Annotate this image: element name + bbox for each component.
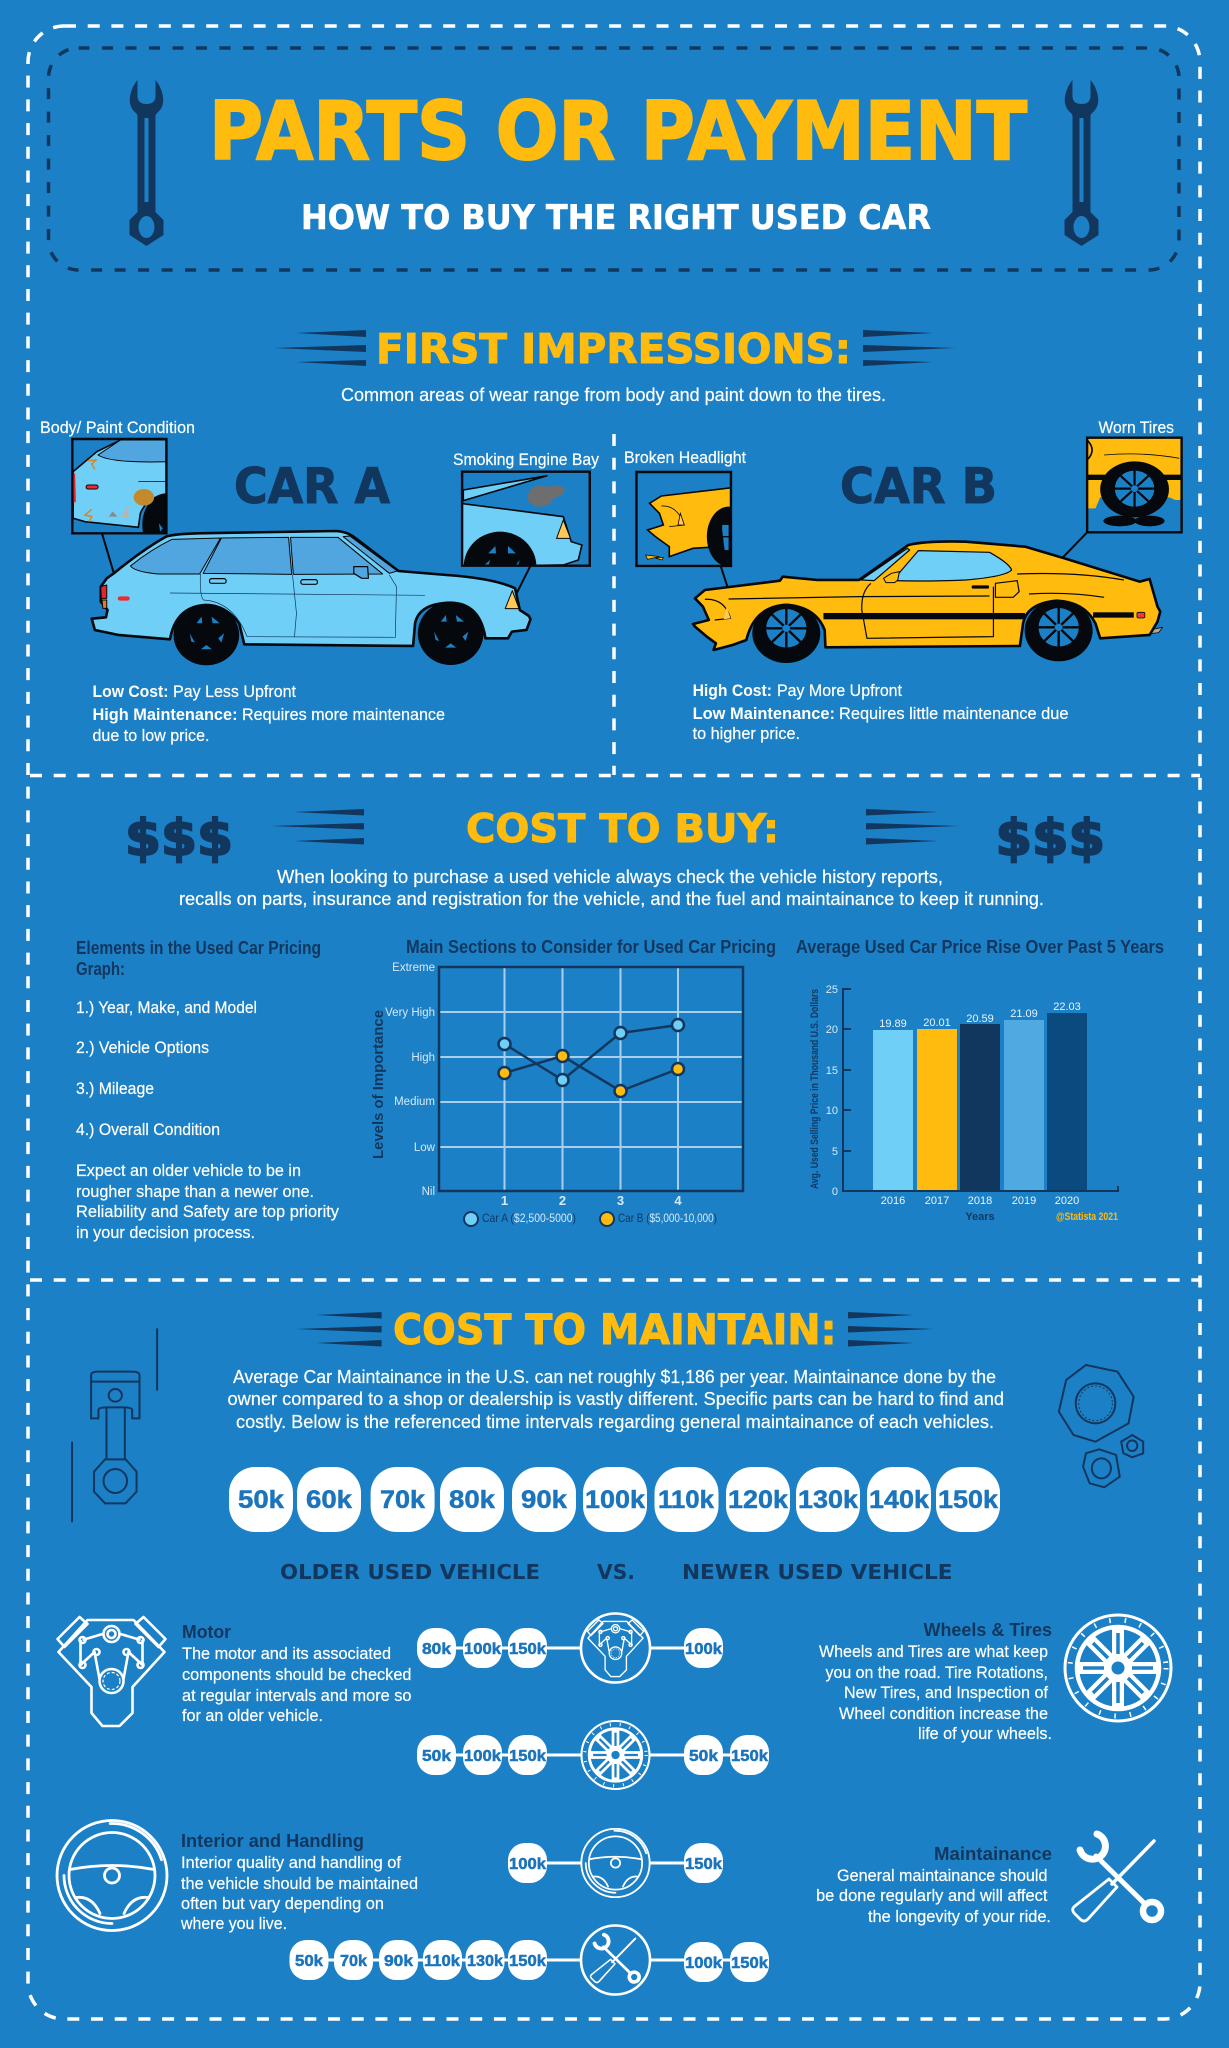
- chart: used car price bars: 15: [826, 1065, 838, 1077]
- chart: used car price bars: 2020: [1055, 1195, 1079, 1207]
- timeline: wheels: [417, 1720, 769, 1790]
- text block: pricing elements: rougher shape than a newer one.: [76, 1182, 314, 1201]
- label: smoking engine bay: Smoking Engine Bay: [453, 450, 599, 469]
- timeline: maintainance: 130k: [467, 1953, 503, 1970]
- panel: car A: [40, 418, 599, 745]
- heading: car A: CAR A: [234, 458, 390, 515]
- timeline: maintainance: 50k: [295, 1953, 323, 1970]
- chart: importance line chart: 4: [674, 1193, 682, 1208]
- text block: pricing elements: Expect an older vehicle to be in: [76, 1161, 301, 1180]
- timeline: interior: 100k: [509, 1856, 546, 1873]
- comparison headings: OLDER USED VEHICLE: [280, 1560, 540, 1584]
- heading: cost to buy: $$$: [125, 809, 233, 867]
- icon: right wrench: [1064, 80, 1098, 246]
- text block: wheels and tires: Wheel condition increase the: [839, 1704, 1048, 1723]
- chart: used car price bars: [796, 937, 1164, 1223]
- text block: maintainance: General maintainance should: [837, 1866, 1048, 1885]
- text: high cost: Low Maintenance:: [693, 704, 835, 723]
- text: low cost: Pay Less Upfront: [173, 682, 296, 701]
- timeline: motor: 100k: [464, 1641, 501, 1658]
- text: high cost: [693, 681, 1068, 743]
- mileage pill scale: 130k: [798, 1486, 858, 1514]
- intro text: cost to maintain: owner compared to a shop or dealership is vastly different. Specific parts can be hard to find and: [228, 1389, 1004, 1409]
- comparison headings: [280, 1560, 952, 1584]
- icon: engine: [58, 1617, 166, 1726]
- chart: importance line chart: Medium: [394, 1096, 435, 1108]
- timeline: maintainance: 110k: [424, 1953, 460, 1970]
- icon: nuts: [1059, 1365, 1143, 1487]
- chart: used car price bars: @Statista 2021: [1056, 1211, 1118, 1223]
- text block: motor: The motor and its associated: [182, 1644, 391, 1663]
- timeline: wheels: 50k: [422, 1748, 451, 1765]
- chart: importance line chart: Low: [414, 1142, 436, 1154]
- text: high cost: to higher price.: [693, 724, 800, 743]
- chart: used car price bars: 2018: [968, 1195, 992, 1207]
- text block: wheels and tires: Wheels & Tires: [924, 1620, 1052, 1640]
- chart title: Main Sections to Consider for Used Car Pricing: [406, 937, 776, 957]
- mileage pill scale: 70k: [380, 1486, 425, 1514]
- timeline: motor: 100k: [685, 1641, 722, 1658]
- heading: car B: CAR B: [840, 458, 997, 515]
- mileage pill scale: 110k: [658, 1486, 714, 1514]
- mileage pill scale: 140k: [869, 1486, 929, 1514]
- label: worn tires: Worn Tires: [1098, 418, 1174, 437]
- chart: importance line chart: 2: [559, 1193, 566, 1208]
- text: low cost: Low Cost:: [92, 682, 168, 701]
- chart: importance line chart: Extreme: [392, 962, 435, 974]
- illustration: light blue wagon: [92, 531, 530, 665]
- chart: used car price bars: 21.09: [1010, 1008, 1038, 1020]
- text block: interior and handling: where you live.: [180, 1914, 287, 1933]
- label: body paint condition: Body/ Paint Condition: [40, 418, 195, 437]
- chart: importance line chart: [370, 937, 776, 1226]
- text block: maintainance: be done regularly and will affect: [816, 1886, 1048, 1905]
- chart: used car price bars: 25: [826, 984, 838, 996]
- text block: pricing elements: [76, 938, 339, 1242]
- text block: motor: [182, 1622, 412, 1725]
- timeline: maintainance: 150k: [731, 1955, 768, 1972]
- chart title: Average Used Car Price Rise Over Past 5 Years: [796, 937, 1164, 957]
- text block: interior and handling: often but vary depending on: [181, 1894, 384, 1913]
- text block: pricing elements: Elements in the Used Car Pricing: [76, 938, 321, 958]
- text block: pricing elements: in your decision process.: [76, 1223, 255, 1242]
- callout: broken headlight: [635, 470, 732, 568]
- text: low cost: Requires more maintenance: [242, 705, 445, 724]
- text block: motor: at regular intervals and more so: [182, 1686, 412, 1705]
- timeline: maintainance: 100k: [685, 1955, 722, 1972]
- heading: cost to buy: $$$: [996, 809, 1105, 867]
- chart: used car price bars: 22.03: [1053, 1001, 1081, 1013]
- mileage pill scale: 90k: [521, 1486, 567, 1514]
- icon: steering wheel: [57, 1820, 167, 1930]
- chart: used car price bars: 20: [826, 1024, 838, 1036]
- timeline: wheels: 50k: [689, 1748, 718, 1765]
- text block: pricing elements: 4.) Overall Condition: [76, 1120, 220, 1139]
- timeline: motor: [417, 1614, 723, 1682]
- mileage pill scale: [229, 1467, 1000, 1532]
- text block: interior and handling: Interior and Handling: [181, 1831, 364, 1851]
- icon: left wrench: [130, 80, 164, 246]
- chart: used car price bars: 2019: [1012, 1195, 1036, 1207]
- intro text: cost to buy: [179, 867, 1044, 909]
- text block: motor: for an older vehicle.: [182, 1706, 323, 1725]
- comparison headings: VS.: [597, 1560, 635, 1584]
- text block: wheels and tires: Wheels and Tires are what keep: [819, 1642, 1048, 1661]
- panel: car B: [624, 418, 1182, 743]
- heading: cost to buy: [125, 807, 1105, 867]
- text block: maintainance: the longevity of your ride.: [868, 1907, 1051, 1926]
- text block: interior and handling: Interior quality and handling of: [181, 1853, 401, 1872]
- comparison headings: NEWER USED VEHICLE: [682, 1560, 952, 1584]
- intro text: cost to maintain: Average Car Maintainance in the U.S. can net roughly $1,186 per year. Maintainance done by the: [233, 1367, 996, 1387]
- text: high cost: Pay More Upfront: [777, 681, 902, 700]
- timeline: wheels: 100k: [464, 1748, 501, 1765]
- intro text: cost to maintain: costly. Below is the referenced time intervals regarding general maintainance of each vehicles.: [236, 1412, 994, 1432]
- callout: worn tires: [1087, 438, 1182, 532]
- mileage pill scale: 120k: [728, 1486, 788, 1514]
- timeline: motor: 80k: [422, 1641, 451, 1658]
- chart: importance line chart: Car B ($5,000-10,000): [618, 1211, 717, 1225]
- intro text: cost to buy: recalls on parts, insurance and registration for the vehicle, and the fuel and maintainance to keep it running.: [179, 889, 1044, 909]
- header: [130, 80, 1098, 246]
- text: low cost: due to low price.: [92, 726, 210, 745]
- intro text: cost to buy: When looking to purchase a used vehicle always check the vehicle history reports,: [277, 867, 943, 887]
- chart: used car price bars: 2017: [925, 1195, 949, 1207]
- timeline: wheels: 150k: [509, 1748, 546, 1765]
- mileage pill scale: 50k: [238, 1486, 284, 1514]
- icon: tools: [1073, 1834, 1161, 1921]
- icon: wheel: [1065, 1615, 1171, 1721]
- text block: pricing elements: 3.) Mileage: [76, 1079, 154, 1098]
- chart: used car price bars: 2016: [881, 1195, 905, 1207]
- mileage pill scale: 150k: [938, 1486, 998, 1514]
- text block: wheels and tires: New Tires, and Inspection of: [844, 1683, 1048, 1702]
- text block: wheels and tires: [819, 1620, 1052, 1743]
- text block: wheels and tires: you on the road. Tire Rotations,: [826, 1663, 1048, 1682]
- timeline: maintainance: 70k: [340, 1953, 367, 1970]
- timeline connectors: [310, 1648, 750, 1960]
- text: high cost: High Cost:: [693, 681, 772, 700]
- text: low cost: [92, 682, 445, 745]
- text block: interior and handling: the vehicle should be maintained: [181, 1874, 418, 1893]
- chart: importance line chart: Very High: [385, 1007, 435, 1019]
- heading: first impressions: FIRST IMPRESSIONS:: [376, 325, 851, 373]
- callout: body damage: [71, 438, 168, 534]
- timeline: maintainance: 150k: [509, 1953, 546, 1970]
- chart: importance line chart: Levels of Importance: [370, 1010, 387, 1159]
- text: low cost: High Maintenance:: [92, 705, 238, 724]
- title: PARTS OR PAYMENT: [209, 85, 1027, 178]
- heading: cost to buy: COST TO BUY:: [466, 807, 779, 852]
- chart: used car price bars: 20.59: [966, 1013, 994, 1025]
- timeline: motor: 150k: [509, 1641, 546, 1658]
- text block: interior and handling: [180, 1831, 418, 1933]
- text block: motor: Motor: [182, 1622, 231, 1642]
- callout: smoking engine bay: [460, 470, 591, 567]
- chart: used car price bars: Avg. Used Selling Price in Thousand U.S. Dollars: [809, 989, 821, 1189]
- text block: maintainance: Maintainance: [934, 1844, 1052, 1864]
- mileage pill scale: 60k: [306, 1486, 352, 1514]
- text block: pricing elements: Reliability and Safety are top priority: [76, 1202, 339, 1221]
- intro text: cost to maintain: [228, 1367, 1004, 1432]
- chart: used car price bars: 0: [832, 1186, 838, 1198]
- text block: pricing elements: 2.) Vehicle Options: [76, 1038, 209, 1057]
- mileage pill scale: 100k: [585, 1486, 645, 1514]
- chart: importance line chart: High: [411, 1052, 435, 1064]
- chart: importance line chart: 1: [501, 1193, 508, 1208]
- label: broken headlight: Broken Headlight: [624, 448, 746, 467]
- chart: used car price bars: 19.89: [879, 1018, 907, 1030]
- timeline: wheels: 150k: [731, 1748, 768, 1765]
- chart: used car price bars: 5: [832, 1146, 838, 1158]
- mileage pill scale: 80k: [449, 1486, 495, 1514]
- subtitle: HOW TO BUY THE RIGHT USED CAR: [301, 198, 931, 238]
- chart: importance line chart: 3: [617, 1193, 624, 1208]
- timeline: interior: [508, 1828, 723, 1898]
- text block: wheels and tires: life of your wheels.: [918, 1724, 1052, 1743]
- timeline: interior: 150k: [685, 1856, 722, 1873]
- timeline: maintainance: 90k: [384, 1953, 413, 1970]
- text block: motor: components should be checked: [182, 1665, 412, 1684]
- illustration: yellow muscle car: [693, 532, 1163, 663]
- text block: maintainance: [816, 1844, 1052, 1926]
- chart: used car price bars: 10: [826, 1105, 838, 1117]
- intro text: first impressions: Common areas of wear range from body and paint down to the tires.: [341, 385, 886, 405]
- text block: pricing elements: 1.) Year, Make, and Model: [76, 998, 257, 1017]
- chart: importance line chart: Nil: [422, 1186, 435, 1198]
- heading: cost to maintain: COST TO MAINTAIN:: [393, 1305, 836, 1354]
- chart: importance line chart: Car A ($2,500-5000): [482, 1211, 576, 1225]
- icon: piston: [72, 1328, 157, 1522]
- text block: pricing elements: Graph:: [76, 959, 125, 979]
- text: high cost: Requires little maintenance due: [839, 704, 1068, 723]
- timeline: maintainance: [290, 1926, 769, 1994]
- chart: used car price bars: Years: [965, 1211, 995, 1223]
- chart: used car price bars: 20.01: [923, 1017, 951, 1029]
